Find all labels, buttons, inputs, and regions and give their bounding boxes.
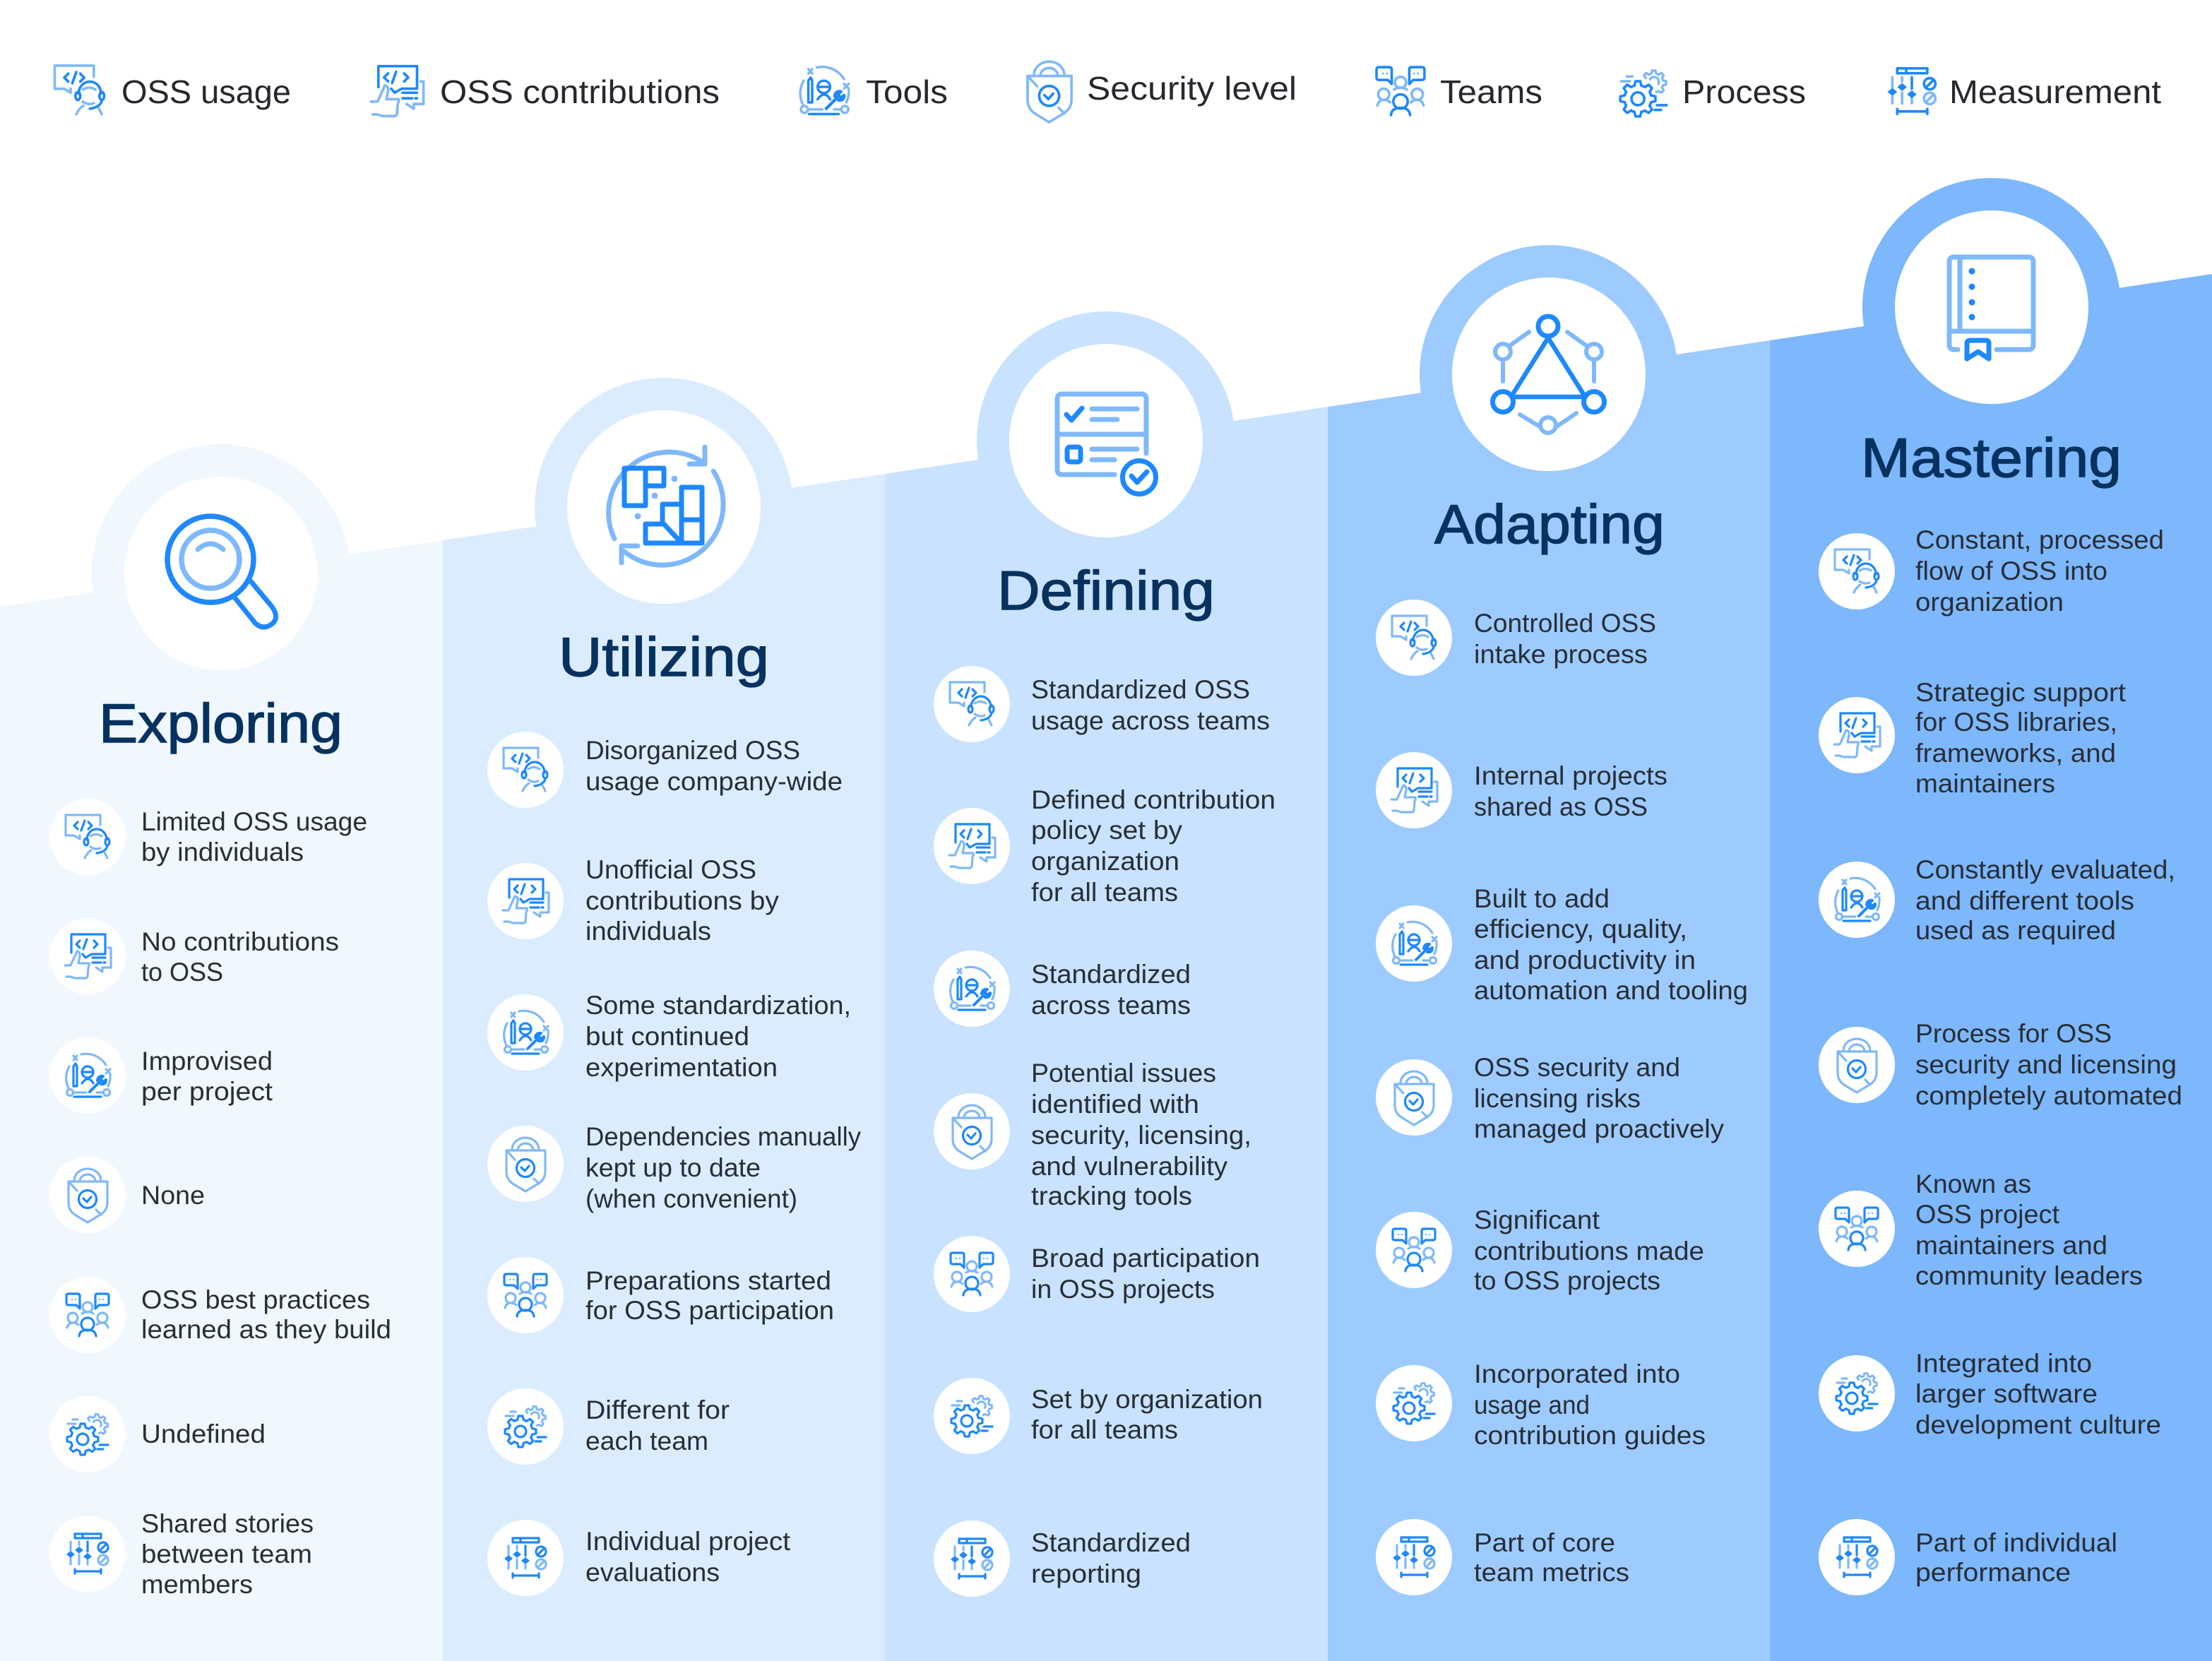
- icon: process: [487, 1388, 564, 1465]
- text: efficiency, quality,: [1474, 915, 1687, 943]
- icon: security: [1376, 1059, 1452, 1136]
- text: for OSS participation: [585, 1296, 834, 1325]
- text: members: [141, 1570, 253, 1599]
- item: teams: [1819, 1169, 2143, 1290]
- text: Individual project: [585, 1527, 791, 1556]
- item: usage: [49, 799, 367, 875]
- item: measurement: [1376, 1519, 1629, 1595]
- text: [1474, 1528, 1629, 1587]
- text: kept up to date: [585, 1153, 761, 1182]
- text: [1474, 1205, 1704, 1295]
- icon: Process: [1620, 71, 1667, 117]
- icon: process: [1376, 1365, 1452, 1441]
- text: Integrated into: [1915, 1349, 2092, 1378]
- item: measurement: [934, 1520, 1191, 1597]
- text: identified with: [1031, 1090, 1199, 1119]
- item: process: [934, 1378, 1263, 1454]
- text: [141, 1047, 273, 1106]
- column background with ring: [1770, 178, 2212, 1661]
- text: [1915, 1169, 2143, 1290]
- text: Limited OSS usage: [141, 807, 367, 836]
- icon: usage: [1819, 533, 1895, 609]
- icon: checklist: [1009, 344, 1203, 537]
- text: [585, 1395, 730, 1455]
- text: [1031, 960, 1191, 1020]
- heading: Defining: Defining: [997, 559, 1215, 621]
- item: usage: [487, 732, 843, 808]
- text: [1915, 1019, 2182, 1110]
- text: Defined contribution: [1031, 785, 1276, 814]
- text: used as required: [1915, 916, 2116, 945]
- item: tools: [1376, 884, 1748, 1005]
- text: [585, 736, 843, 796]
- text: managed proactively: [1474, 1114, 1725, 1143]
- icon: teams: [49, 1277, 126, 1353]
- icon: security: [487, 1126, 564, 1202]
- text: Preparations started: [585, 1266, 831, 1295]
- text: [585, 1527, 791, 1587]
- icon: measurement: [1819, 1519, 1895, 1595]
- icon: tools: [1376, 905, 1452, 982]
- icon: security: [934, 1093, 1010, 1169]
- legend: Security level: [1028, 61, 1297, 122]
- icon: contributions: [934, 808, 1010, 884]
- text: frameworks, and: [1915, 739, 2116, 768]
- column background with ring: [885, 311, 1328, 1661]
- item: usage: [1376, 600, 1656, 676]
- text: [141, 927, 339, 987]
- text: OSS project: [1915, 1200, 2060, 1229]
- item: security: [487, 1122, 861, 1213]
- item: teams: [487, 1257, 834, 1333]
- panel: Adapting: [1328, 245, 1770, 1661]
- text: Known as: [1915, 1169, 2031, 1198]
- text: Shared stories: [141, 1509, 314, 1538]
- text: [141, 807, 367, 867]
- icon: teams: [487, 1257, 564, 1333]
- legend: OSS usage: OSS usage: [121, 73, 291, 110]
- icon: contributions: [49, 918, 126, 994]
- text: and vulnerability: [1031, 1152, 1228, 1181]
- text: maintainers and: [1915, 1231, 2107, 1260]
- text: [1031, 1385, 1263, 1444]
- legend: Measurement: [1887, 69, 2161, 114]
- text: evaluations: [585, 1558, 720, 1587]
- item: process: [487, 1388, 730, 1465]
- item: contributions: [1819, 678, 2127, 798]
- item: security: [1376, 1053, 1725, 1143]
- item: contributions: [1376, 752, 1667, 828]
- panel: Defining: [885, 311, 1328, 1661]
- heading: Adapting: Adapting: [1434, 493, 1665, 555]
- icon: Security level: [1028, 61, 1071, 122]
- panel: Utilizing: [443, 378, 885, 1661]
- text: individuals: [585, 917, 711, 946]
- text: [141, 1509, 314, 1599]
- text: Improvised: [141, 1047, 273, 1076]
- item: process: [1376, 1359, 1706, 1450]
- text: organization: [1031, 847, 1179, 876]
- text: [1031, 1059, 1251, 1210]
- text: learned as they build: [141, 1315, 391, 1344]
- icon: tools: [49, 1037, 126, 1114]
- icon: measurement: [49, 1516, 126, 1592]
- text: [585, 1266, 834, 1325]
- text: Constant, processed: [1915, 525, 2164, 554]
- legend: Security level: Security level: [1087, 70, 1297, 107]
- text: None: [141, 1181, 205, 1210]
- icon: contributions: [1376, 752, 1452, 828]
- icon: usage: [487, 732, 564, 808]
- icon: measurement: [1376, 1519, 1452, 1595]
- text: Strategic support: [1915, 678, 2127, 707]
- item: contributions: [487, 855, 780, 946]
- item: process: [49, 1396, 266, 1472]
- icon: kanban cycle: [567, 410, 761, 604]
- item: teams: [1376, 1205, 1704, 1295]
- text: [1031, 785, 1276, 907]
- icon: tools: [487, 994, 564, 1071]
- text: usage company-wide: [585, 767, 843, 796]
- text: Dependencies manually: [585, 1122, 861, 1151]
- icon: tools: [934, 951, 1010, 1027]
- text: intake process: [1474, 640, 1648, 669]
- icon: Measurement: [1887, 69, 1935, 114]
- text: Different for: [585, 1395, 730, 1424]
- item: process: [1819, 1349, 2161, 1439]
- text: completely automated: [1915, 1081, 2182, 1110]
- text: for all teams: [1031, 1415, 1178, 1444]
- item: teams: [934, 1236, 1260, 1312]
- icon: contributions: [487, 863, 564, 939]
- text: in OSS projects: [1031, 1275, 1215, 1304]
- text: Set by organization: [1031, 1385, 1263, 1414]
- text: contribution guides: [1474, 1421, 1706, 1450]
- icon: OSS usage: [54, 66, 105, 114]
- text: [1031, 675, 1270, 735]
- text: [585, 1122, 861, 1213]
- text: security, licensing,: [1031, 1121, 1251, 1150]
- column background with ring: [1328, 245, 1770, 1661]
- item: measurement: [1819, 1519, 2117, 1595]
- item: teams: [49, 1277, 391, 1353]
- item: security: [49, 1157, 205, 1233]
- text: [141, 1285, 391, 1344]
- icon: teams: [1376, 1212, 1452, 1288]
- text: flow of OSS into: [1915, 556, 2107, 585]
- icon: process: [49, 1396, 126, 1472]
- text: [585, 855, 780, 946]
- text: Standardized: [1031, 1528, 1191, 1557]
- text: Standardized: [1031, 960, 1191, 989]
- text: Significant: [1474, 1205, 1600, 1234]
- text: reporting: [1031, 1559, 1141, 1588]
- text: Part of core: [1474, 1528, 1615, 1557]
- text: performance: [1915, 1558, 2071, 1587]
- item: measurement: [49, 1509, 314, 1599]
- item: tools: [1819, 855, 2175, 945]
- icon: security: [49, 1157, 126, 1233]
- text: development culture: [1915, 1410, 2161, 1439]
- legend: Teams: [1376, 67, 1542, 115]
- item: contributions: [934, 785, 1276, 907]
- item: tools: [934, 951, 1191, 1027]
- icon: OSS contributions: [371, 66, 424, 117]
- icon: measurement: [487, 1520, 564, 1596]
- icon: usage: [49, 799, 126, 875]
- text: [1915, 855, 2175, 945]
- text: [1474, 1359, 1706, 1450]
- text: but continued: [585, 1022, 749, 1051]
- icon: tools: [1819, 862, 1895, 938]
- legend: OSS usage: [54, 66, 291, 114]
- text: [585, 991, 851, 1082]
- text: community leaders: [1915, 1261, 2143, 1290]
- icon: magnifier: [124, 477, 318, 670]
- text: Undefined: [141, 1419, 266, 1448]
- text: policy set by: [1031, 816, 1183, 845]
- text: [1031, 1528, 1191, 1588]
- text: [1474, 761, 1667, 821]
- icon: Teams: [1376, 67, 1425, 115]
- text: Incorporated into: [1474, 1359, 1680, 1388]
- text: Some standardization,: [585, 991, 851, 1020]
- text: tracking tools: [1031, 1181, 1192, 1210]
- text: [1474, 609, 1656, 669]
- text: licensing risks: [1474, 1084, 1641, 1113]
- text: per project: [141, 1077, 273, 1106]
- text: and different tools: [1915, 886, 2134, 915]
- legend: OSS contributions: OSS contributions: [440, 73, 720, 110]
- legend: OSS contributions: [371, 66, 720, 117]
- text: usage across teams: [1031, 706, 1270, 735]
- icon: process: [1819, 1355, 1895, 1431]
- text: for all teams: [1031, 878, 1178, 907]
- icon: measurement: [934, 1520, 1010, 1597]
- text: Unofficial OSS: [585, 855, 756, 884]
- text: between team: [141, 1540, 312, 1568]
- icon: teams: [1819, 1191, 1895, 1267]
- text: Process for OSS: [1915, 1019, 2112, 1048]
- text: to OSS: [141, 958, 223, 987]
- text: for OSS libraries,: [1915, 708, 2117, 737]
- legend: Tools: Tools: [866, 73, 948, 110]
- item: contributions: [49, 918, 339, 994]
- text: OSS best practices: [141, 1285, 370, 1314]
- heading: Mastering: Mastering: [1861, 427, 2122, 489]
- panel: Mastering: [1770, 178, 2212, 1661]
- icon: process: [934, 1378, 1010, 1454]
- text: [1474, 1053, 1725, 1143]
- item: tools: [487, 991, 851, 1082]
- text: larger software: [1915, 1379, 2098, 1408]
- panel: Exploring: [0, 444, 443, 1661]
- item: measurement: [487, 1520, 791, 1596]
- text: Disorganized OSS: [585, 736, 800, 765]
- text: [1474, 884, 1748, 1005]
- text: Built to add: [1474, 884, 1610, 913]
- icon: usage: [934, 666, 1010, 742]
- text: team metrics: [1474, 1558, 1629, 1587]
- text: to OSS projects: [1474, 1266, 1660, 1295]
- text: security and licensing: [1915, 1050, 2177, 1079]
- item: usage: [1819, 525, 2164, 617]
- text: Potential issues: [1031, 1059, 1216, 1088]
- text: maintainers: [1915, 769, 2055, 798]
- icon: security: [1819, 1027, 1895, 1103]
- text: across teams: [1031, 991, 1191, 1020]
- icon: contributions: [1819, 697, 1895, 773]
- heading: Exploring: Exploring: [99, 692, 343, 754]
- text: [1915, 678, 2127, 798]
- icon: Tools: [800, 67, 849, 114]
- text: [1915, 525, 2164, 617]
- text: usage and: [1474, 1391, 1590, 1419]
- legend: Measurement: Measurement: [1949, 73, 2161, 110]
- icon: teams: [934, 1236, 1010, 1312]
- text: shared as OSS: [1474, 792, 1648, 821]
- text: OSS security and: [1474, 1053, 1680, 1082]
- text: contributions by: [585, 886, 780, 915]
- text: [1031, 1244, 1260, 1304]
- text: by individuals: [141, 838, 304, 867]
- legend: Tools: [800, 67, 948, 114]
- text: Constantly evaluated,: [1915, 855, 2175, 884]
- text: experimentation: [585, 1053, 778, 1082]
- item: tools: [49, 1037, 273, 1114]
- icon: book: [1895, 210, 2088, 404]
- legend: Process: Process: [1682, 73, 1806, 110]
- text: No contributions: [141, 927, 339, 956]
- text: each team: [585, 1427, 708, 1455]
- text: automation and tooling: [1474, 976, 1748, 1005]
- legend: Teams: Teams: [1440, 73, 1542, 110]
- icon: usage: [1376, 600, 1452, 676]
- column background with ring: [443, 378, 885, 1661]
- text: contributions made: [1474, 1237, 1704, 1266]
- text: Internal projects: [1474, 761, 1667, 790]
- text: Broad participation: [1031, 1244, 1260, 1273]
- item: security: [934, 1059, 1251, 1210]
- text: organization: [1915, 588, 2064, 617]
- text: Controlled OSS: [1474, 609, 1656, 638]
- item: security: [1819, 1019, 2182, 1110]
- header legend: [54, 61, 2161, 122]
- text: Part of individual: [1915, 1528, 2117, 1557]
- heading: Utilizing: Utilizing: [559, 626, 769, 688]
- legend: Process: [1620, 71, 1806, 117]
- text: [1915, 1528, 2117, 1587]
- item: usage: [934, 666, 1270, 742]
- text: Standardized OSS: [1031, 675, 1250, 704]
- text: (when convenient): [585, 1184, 797, 1213]
- column background with ring: [0, 444, 443, 1661]
- icon: network triangle: [1452, 278, 1646, 471]
- text: and productivity in: [1474, 946, 1696, 975]
- text: [1915, 1349, 2161, 1439]
